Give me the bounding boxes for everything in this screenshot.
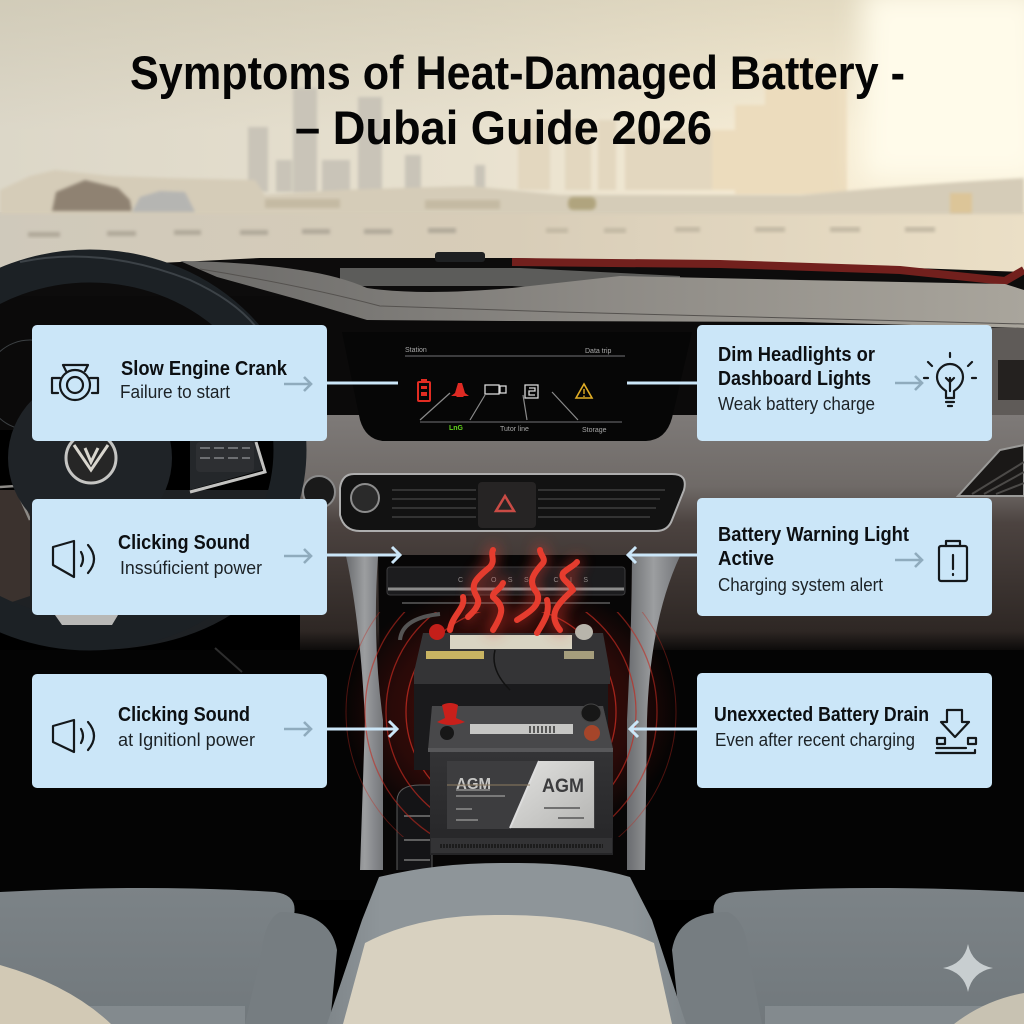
AGM label panel (447, 761, 594, 828)
heat waves (450, 550, 577, 633)
panel: Clicking Sound, insufficient power (32, 499, 327, 615)
arrow (284, 722, 311, 736)
infotainment screen: Tutor line (500, 426, 529, 433)
infotainment screen: Storage (582, 427, 607, 434)
infotainment screen: Data trip (585, 348, 612, 355)
icon: engine (52, 365, 98, 400)
background: Dubai skyline through windshield (0, 0, 1024, 280)
icon: white status 2 (525, 385, 538, 398)
heading: Dim Headlights or Dashboard Lights: Dim Headlights or (718, 344, 875, 366)
heat rings around battery (346, 612, 676, 837)
heading: Dim Headlights or Dashboard Lights: Dashboard Lights (718, 368, 871, 390)
AGM label panel: AGM (456, 776, 491, 793)
icon: white status 1 (485, 385, 506, 394)
heading: Clicking Sound: Clicking Sound (118, 532, 250, 554)
infotainment screen: Station (405, 347, 427, 354)
heading: Battery Warning Light Active: Active (718, 548, 774, 570)
icon: drain arrow (936, 710, 976, 753)
arrow (895, 376, 922, 390)
steering wheel (0, 256, 300, 672)
infotainment screen (342, 332, 692, 441)
panel: Unexpected Battery Drain (697, 673, 992, 788)
icon: battery alert (939, 541, 967, 581)
title: – Dubai Guide 2026 (295, 101, 712, 154)
windshield base and red trim (0, 252, 1024, 300)
center console (341, 555, 681, 875)
AGM label panel: AGM (542, 776, 584, 797)
icon: speaker (53, 541, 94, 577)
seats and armrest (0, 863, 1024, 1024)
red positive terminal (437, 703, 465, 725)
climate vent with hazard button (303, 474, 685, 531)
rear battery (400, 614, 610, 770)
panel: Slow Engine Crank (32, 325, 327, 441)
icon: sparkle watermark (943, 944, 993, 992)
dark recess behind cards (0, 296, 1024, 430)
top dashboard pad (180, 261, 1024, 328)
infotainment screen: LnG (449, 425, 464, 432)
text: Even after recent charging: Even after recent charging (715, 730, 915, 750)
panel: Dim Headlights (697, 325, 992, 441)
arrow (284, 377, 311, 391)
heading: Battery Warning Light Active: Battery Warning Light (718, 524, 909, 546)
icon: light bulb (924, 353, 976, 406)
icon: amber warning triangle (576, 384, 592, 398)
title (130, 46, 905, 154)
icon: speaker (53, 720, 94, 752)
text: Charging system alert: Charging system alert (718, 575, 883, 595)
icon: red battery warning (418, 379, 430, 401)
arrow (895, 553, 922, 567)
heading: Slow Engine Crank: Slow Engine Crank (121, 358, 288, 380)
text: at Ignitionl power: at Ignitionl power (118, 730, 255, 750)
armrest (327, 863, 686, 1024)
mid dashboard panel (0, 328, 1024, 900)
panel: Clicking Sound at ignition (32, 674, 327, 788)
text: Weak battery charge: Weak battery charge (718, 394, 875, 414)
text: Failure to start: Failure to start (120, 382, 230, 402)
panel: Battery Warning Light (697, 498, 992, 616)
center console: CROSS CIS (458, 577, 588, 584)
heading: Unexxected Battery Drain: Unexxected Battery Drain (714, 704, 929, 726)
heading: Clicking Sound: Clicking Sound (118, 704, 250, 726)
title: Symptoms of Heat-Damaged Battery - (130, 46, 905, 99)
connector lines with arrowheads (327, 383, 697, 737)
arrow (284, 549, 311, 563)
text: Inssuficient power: Inssúficient power (120, 558, 262, 578)
icon: red seatbelt warning (451, 383, 469, 397)
front AGM battery (428, 703, 613, 855)
